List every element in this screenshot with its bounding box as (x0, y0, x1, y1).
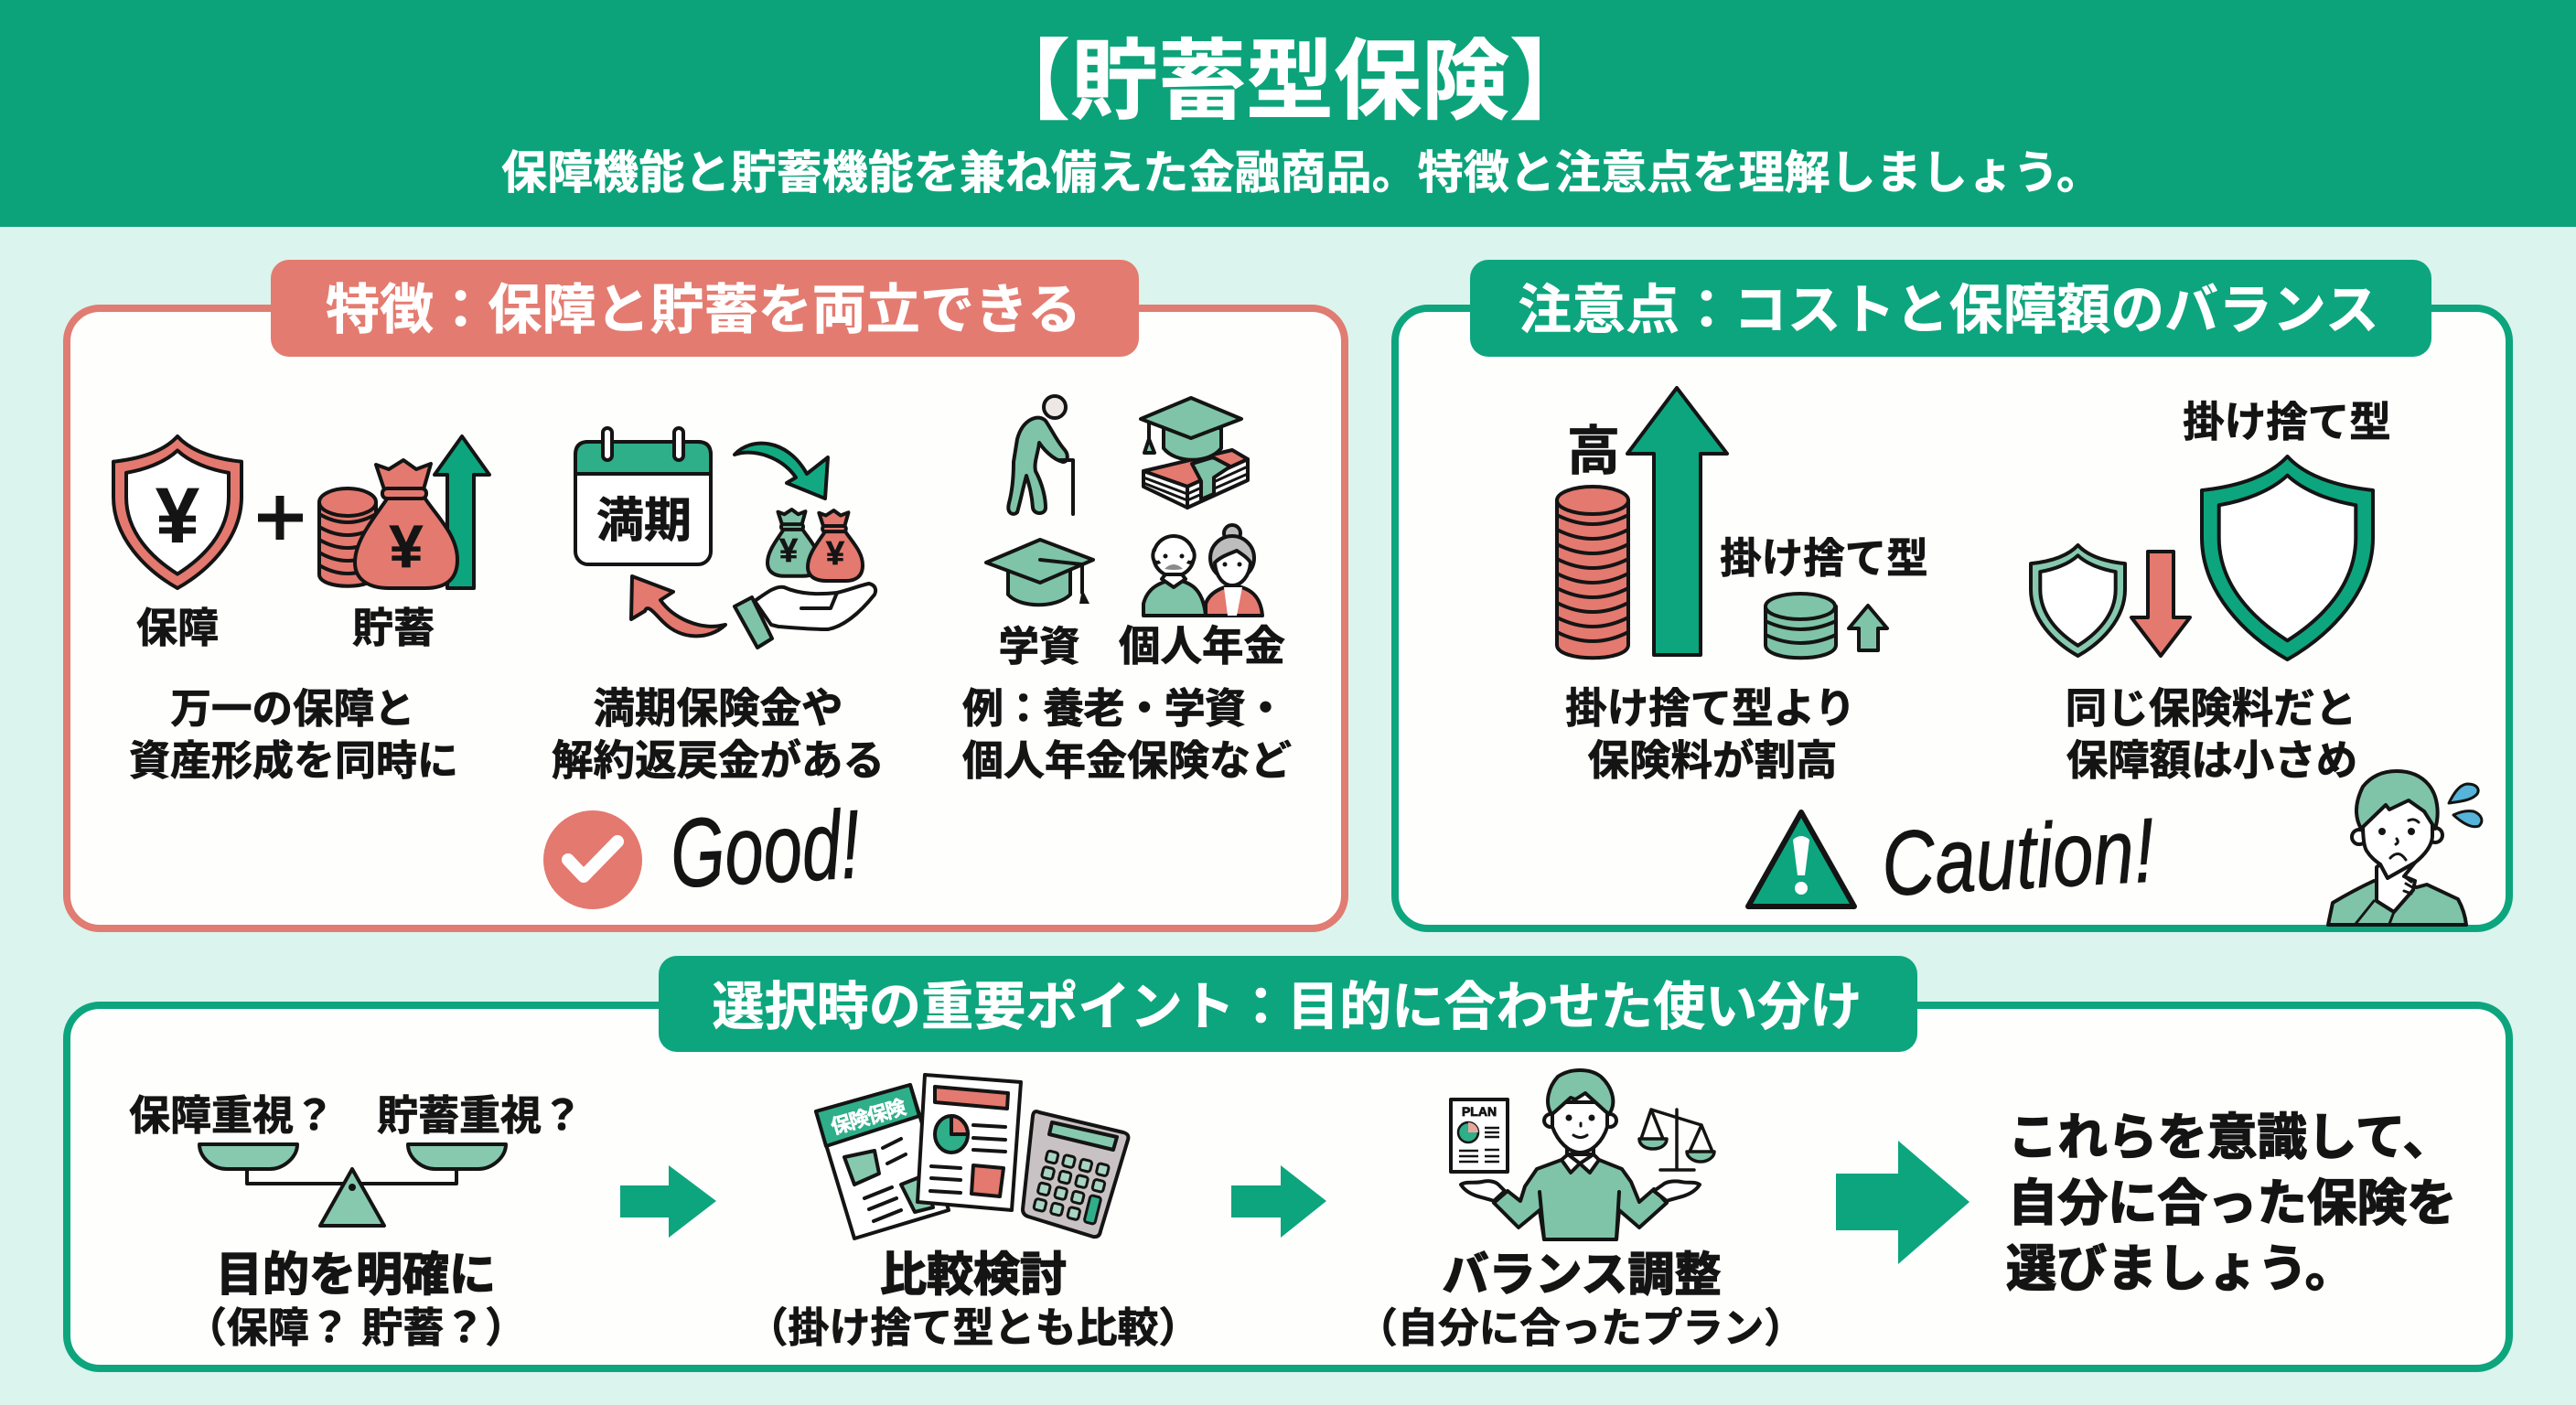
text: caution 2: 保障額は小さめ (2066, 737, 2357, 784)
icon: maturity calendar (575, 428, 711, 564)
text: conclusion: 自分に合った保険を (2008, 1175, 2457, 1231)
icon: large shield (2202, 456, 2373, 660)
arrow: to conclusion (1836, 1141, 1970, 1264)
arrow: red curved (631, 576, 725, 636)
arrow: step 2 to 3 (1231, 1165, 1326, 1238)
text: step 2: （掛け捨て型とも比較） (746, 1304, 1200, 1351)
icon: hanging scales (1639, 1110, 1714, 1170)
text: step 2: 比較検討 (880, 1249, 1067, 1301)
text: step 3: （自分に合ったプラン） (1357, 1306, 1805, 1351)
features heading pill: 特徴：保障と貯蓄を両立できる (326, 280, 1081, 340)
handwritten Caution: Caution! (1879, 799, 2157, 916)
text: step 2 (746, 1249, 1200, 1351)
icon: elderly person with cane (1008, 396, 1073, 514)
icon: documents and calculator (816, 1075, 1128, 1239)
icon: documents and calculator: 保険保険 (828, 1096, 908, 1139)
text: step 1: 目的を明確に (216, 1249, 496, 1301)
arrow: red down (2131, 552, 2190, 656)
labels: protection or savings (129, 1092, 583, 1139)
text: feature 3 (962, 685, 1292, 784)
text: step 1 (186, 1249, 526, 1351)
icon: coins, money bag and growth arrow: ¥ (390, 512, 424, 580)
text: caution 2 (2066, 685, 2357, 784)
subtitle: 保障機能と貯蓄機能を兼ね備えた金融商品。特徴と注意点を理解しましょう。 (501, 147, 2102, 198)
title: 【貯蓄型保険】 (982, 33, 1597, 131)
text: caution 1: 掛け捨て型より (1565, 685, 1856, 732)
icon: warning triangle (1748, 812, 1854, 906)
label: term insurance: 掛け捨て型 (1720, 535, 1928, 582)
key points heading pill: 選択時の重要ポイント：目的に合わせた使い分け (712, 978, 1862, 1036)
icon: plus (258, 496, 303, 540)
icon: small money bags: ¥ (779, 531, 798, 569)
icon: small money bags (767, 509, 863, 581)
icon: yen shield: ¥ (156, 473, 199, 560)
panel: cautions (1395, 260, 2509, 928)
text: feature 1: 資産形成を同時に (129, 737, 458, 784)
text: conclusion: 選びましょう。 (2006, 1240, 2356, 1297)
panel: features (67, 260, 1345, 928)
text: caution 1: 保険料が割高 (1587, 737, 1838, 784)
label: savings: 貯蓄 (352, 605, 435, 651)
icon: coins, money bag and growth arrow (319, 436, 489, 588)
header band (0, 0, 2576, 227)
cautions heading pill (1470, 260, 2431, 357)
text: caution 1 (1565, 685, 1856, 784)
arrow: big up (1627, 388, 1727, 655)
arrow: step 1 to 2 (620, 1165, 716, 1238)
arrow: green curved (735, 444, 828, 499)
icon: graduation cap (986, 540, 1093, 605)
labels: education and pension: 学資 (998, 625, 1080, 670)
icon: short coin stack (1766, 594, 1836, 658)
icon: tall coin stack (1557, 487, 1628, 658)
features heading pill (271, 260, 1139, 357)
labels: education and pension (998, 623, 1285, 670)
labels: education and pension: 個人年金 (1119, 623, 1285, 670)
label: high: 高 (1567, 422, 1620, 481)
text: feature 1: 万一の保障と (170, 687, 415, 732)
text: step 3: バランス調整 (1443, 1249, 1721, 1301)
labels: protection or savings: 保障重視？ (129, 1092, 335, 1139)
key points heading pill (659, 956, 1917, 1052)
icon: check mark (543, 810, 642, 909)
icon: person balancing (1461, 1070, 1700, 1239)
icon: worried person (2328, 771, 2482, 925)
icon: plan document: PLAN (1462, 1104, 1497, 1119)
text: conclusion: これらを意識して、 (2008, 1110, 2453, 1165)
text: feature 2 (552, 685, 885, 784)
text: feature 2: 解約返戻金がある (552, 737, 885, 784)
text: step 3 (1357, 1249, 1805, 1351)
icon: balance scale (199, 1144, 506, 1226)
icon: graduation cap on books (1141, 398, 1248, 508)
icon: open hand (735, 584, 875, 648)
text: conclusion (2006, 1110, 2457, 1297)
text: feature 3: 個人年金保険など (962, 737, 1292, 784)
icon: elderly couple (1143, 525, 1262, 616)
label: protection: 保障 (136, 605, 219, 651)
icon: plan document (1451, 1099, 1508, 1172)
label: term insurance top: 掛け捨て型 (2183, 399, 2391, 445)
labels: protection or savings: 貯蓄重視？ (377, 1092, 583, 1139)
text: feature 2: 満期保険金や (593, 685, 843, 732)
icon: small money bags: ¥ (826, 534, 844, 572)
icon: small shield (2031, 545, 2125, 656)
text: feature 3: 例：養老・学資・ (962, 685, 1286, 732)
text: step 1: （保障？ 貯蓄？） (186, 1304, 526, 1351)
text: feature 1 (129, 687, 458, 784)
cautions heading pill: 注意点：コストと保障額のバランス (1519, 281, 2378, 340)
icon: maturity calendar: 満期 (596, 495, 692, 548)
panel: key points (67, 956, 2509, 1368)
text: caution 2: 同じ保険料だと (2066, 685, 2356, 732)
arrow: small up (1849, 606, 1887, 650)
handwritten Good: Good! (668, 789, 863, 908)
icon: yen shield (113, 436, 242, 588)
